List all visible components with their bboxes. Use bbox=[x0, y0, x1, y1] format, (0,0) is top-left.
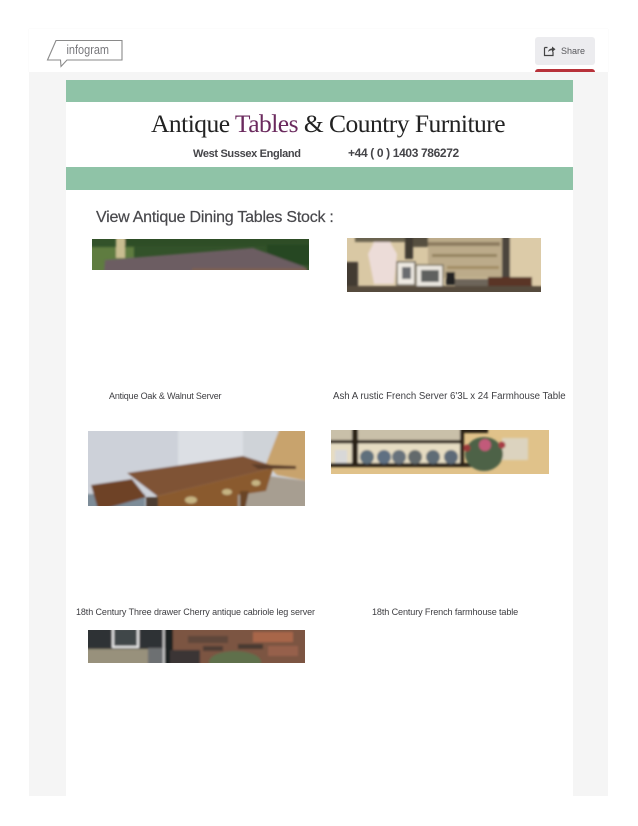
white content panel bbox=[66, 80, 573, 796]
caption: 18th Century Three drawer Cherry antique cabriole leg server bbox=[76, 607, 315, 617]
share label: Share bbox=[561, 46, 585, 56]
icon: share bbox=[544, 46, 556, 56]
lower green banner bbox=[66, 167, 573, 190]
caption: Antique Oak & Walnut Server bbox=[109, 391, 221, 401]
caption: Ash A rustic French Server 6'3L x 24 Farmhouse Table bbox=[333, 391, 566, 402]
title: Antique Tables & Country Furniture bbox=[151, 109, 505, 138]
gray page background bbox=[29, 72, 608, 796]
photo: french farmhouse table bbox=[331, 430, 549, 474]
share button bbox=[535, 37, 595, 65]
section heading: View Antique Dining Tables Stock : bbox=[96, 209, 334, 226]
caption: 18th Century French farmhouse table bbox=[372, 607, 518, 617]
photo: ash french server bbox=[347, 238, 541, 292]
top toolbar bbox=[29, 29, 608, 72]
red button edge bbox=[535, 69, 595, 72]
phone number: +44 ( 0 ) 1403 786272 bbox=[348, 146, 459, 160]
photo: oak and walnut server bbox=[92, 239, 309, 270]
photo: brick courtyard bbox=[88, 630, 305, 663]
top green banner bbox=[66, 80, 573, 102]
photo: three drawer cherry server bbox=[88, 431, 305, 506]
infogram logo: infogram bbox=[66, 42, 109, 57]
infogram logo bbox=[46, 40, 123, 68]
location: West Sussex England bbox=[193, 148, 301, 160]
